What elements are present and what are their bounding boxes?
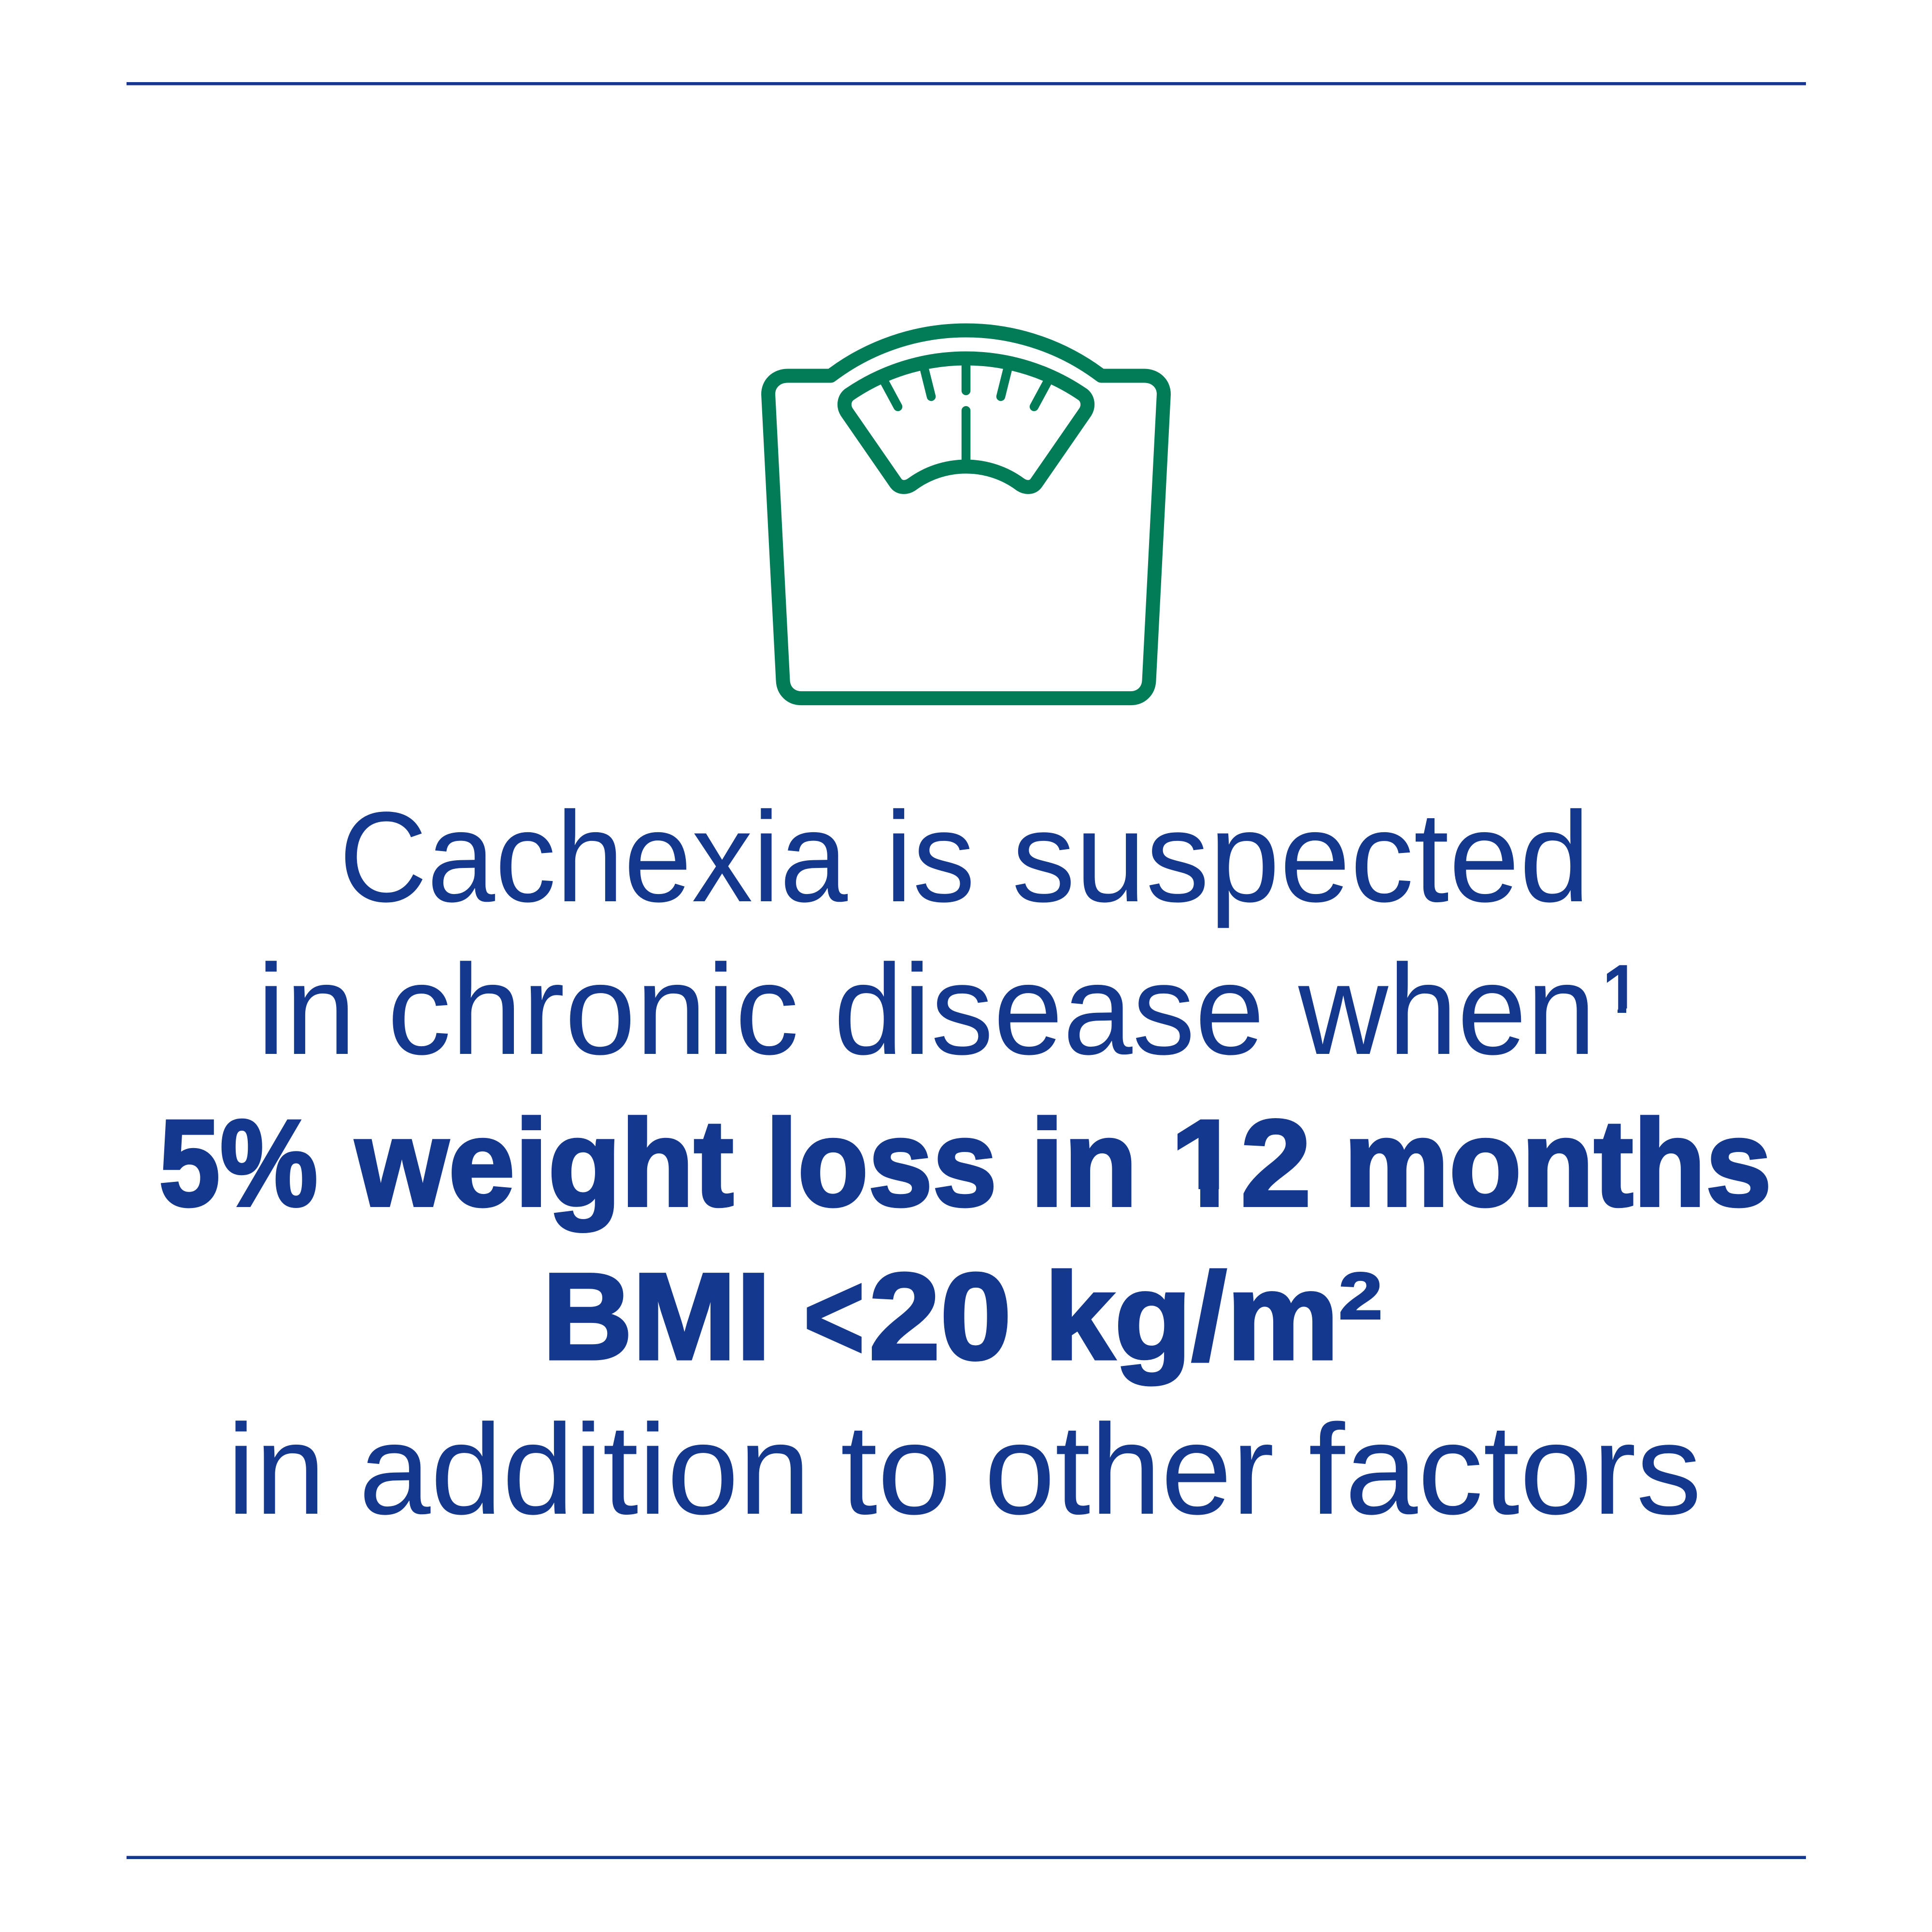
text line 2: disease [834,938,1264,1081]
text line 2: 1 [1601,951,1641,1032]
text line 4: BMI criterion: BMI [542,1248,771,1385]
text line 5: to [840,1398,952,1541]
text line 3: weight loss criterion: 2 [1240,1094,1311,1232]
text line 3: weight loss criterion: 1 [1170,1094,1241,1232]
text line 5: in [227,1398,326,1541]
scale body [768,330,1164,698]
text line 4: BMI criterion: < [804,1248,865,1385]
text line 4: BMI criterion: 2 [1339,1259,1382,1333]
text line 2: chronic [387,938,799,1081]
text line 2 [266,961,1627,1055]
bottom rule [127,1856,1806,1859]
text line 5: addition [359,1398,810,1541]
text line 1: is [885,785,975,929]
icon: weighing scale [768,330,1164,698]
text line 1: Cachexia [339,785,849,929]
dial ticks and needle [885,358,1047,467]
text line 3: weight loss criterion: loss [766,1094,997,1232]
text line 2: when [1296,938,1596,1081]
text line 4: BMI criterion: kg/m [1044,1248,1339,1385]
text line 2: in [257,938,356,1081]
text line 1 [339,785,1590,929]
text line 5: factors [1308,1398,1702,1541]
text line 3: weight loss criterion: in [1030,1094,1137,1232]
text line 3: weight loss criterion: weight [355,1094,734,1232]
text line 3: weight loss criterion: 5% [159,1094,318,1232]
text line 4: BMI criterion [542,1248,1382,1385]
dial window [844,358,1088,487]
top rule [127,82,1806,85]
text line 3: weight loss criterion [160,1115,1768,1233]
text line 5 [227,1398,1702,1541]
text line 1: suspected [1012,785,1590,929]
text line 3: weight loss criterion: months [1344,1094,1772,1232]
text line 5: other [984,1398,1274,1541]
text line 4: BMI criterion: 20 [869,1248,1011,1385]
